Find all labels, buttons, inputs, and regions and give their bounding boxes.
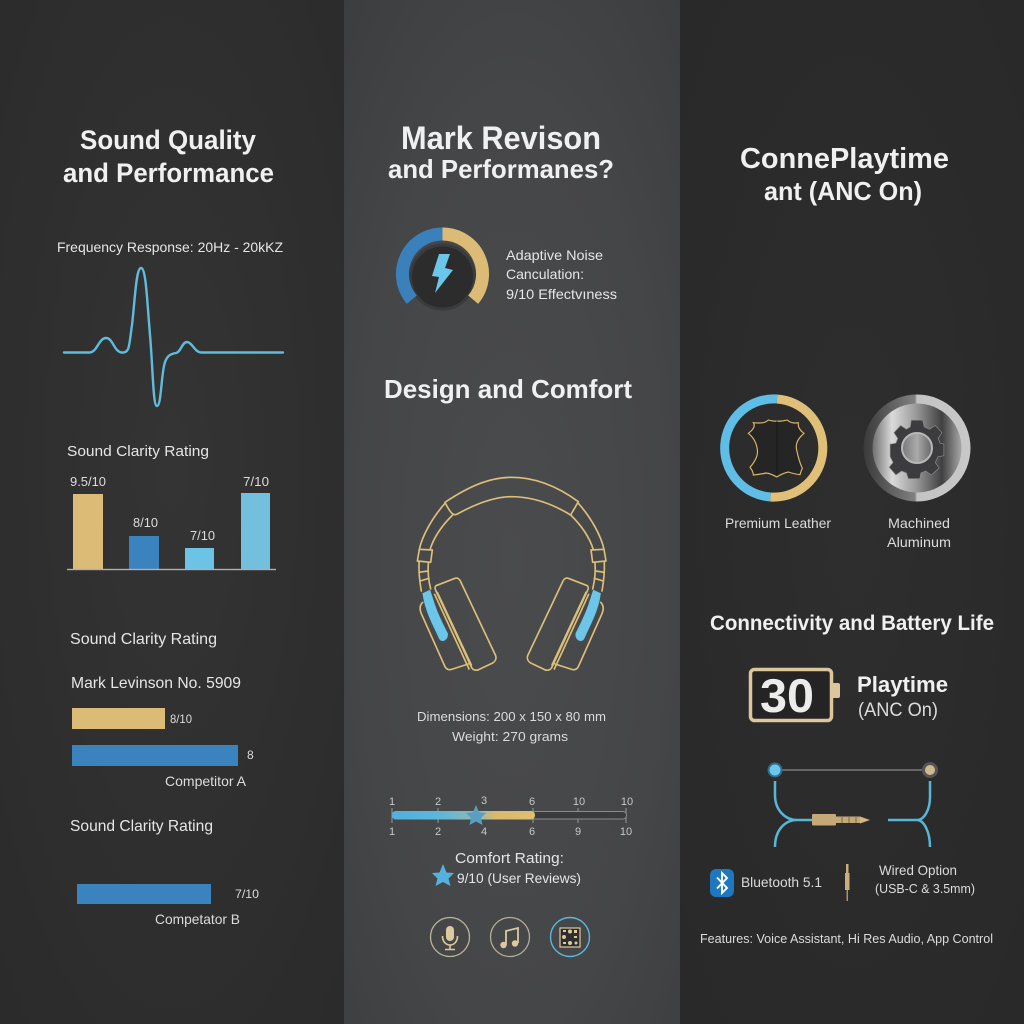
panel: materials and connectivity xyxy=(680,0,1024,1024)
text: comfort rating: 9/10 (User Reviews) xyxy=(457,870,581,886)
icon: microphone xyxy=(430,918,470,956)
frequency response label: Frequency Response: 20Hz - 20kKZ xyxy=(57,239,283,255)
text: comfort rating xyxy=(432,850,581,886)
text: dimensions and weight: Weight: 270 grams xyxy=(452,729,569,744)
icon: bluetooth xyxy=(710,869,734,897)
chart: frequency response wave xyxy=(64,268,283,406)
label: premium leather: Premium Leather xyxy=(725,515,831,531)
chart: comfort rating slider: 10 xyxy=(620,826,632,838)
chart: comfort rating slider: 3 xyxy=(481,795,487,807)
heading: sound quality and performance: Sound Quality xyxy=(80,125,256,155)
heading: sound quality and performance: and Performance xyxy=(63,158,274,188)
chart: sound clarity bars: 7/10 xyxy=(190,528,215,543)
chart: comfort rating slider: 6 xyxy=(529,826,535,838)
chart: competitor comparison A: Sound Clarity Rating xyxy=(70,631,217,648)
icon: battery 30 hours xyxy=(750,669,840,722)
chart: comfort rating slider: 10 xyxy=(573,796,585,808)
text: wired option xyxy=(875,862,975,896)
chart: competitor comparison A: Competitor A xyxy=(165,773,247,789)
text: adaptive noise cancellation xyxy=(506,247,617,302)
chart: competitor comparison B: 7/10 xyxy=(235,887,259,901)
chart: competitor comparison A: 8/10 xyxy=(170,712,192,726)
icon: vertical jack xyxy=(845,864,850,901)
icon: app control xyxy=(550,918,590,956)
label: bluetooth: Bluetooth 5.1 xyxy=(741,874,822,890)
heading: conneplaytime: ConnePlaytime xyxy=(740,143,949,175)
chart: comfort rating slider: 10 xyxy=(621,796,633,808)
text: wired option: (USB-C & 3.5mm) xyxy=(875,882,975,896)
heading: sound quality and performance xyxy=(63,125,274,188)
icon: slider star xyxy=(466,805,486,825)
chart: comfort rating slider: 2 xyxy=(435,826,441,838)
heading: conneplaytime: ant (ANC On) xyxy=(764,176,922,206)
icon: music note xyxy=(490,918,530,956)
chart: competitor comparison A xyxy=(70,631,254,789)
panel: sound quality xyxy=(0,0,344,1024)
chart: comfort rating slider: 4 xyxy=(481,826,487,838)
icon: audio jack xyxy=(812,814,870,826)
icon: lightning bolt xyxy=(432,254,453,293)
chart: competitor comparison A: 8 xyxy=(247,748,254,762)
chart: comfort rating slider: 1 xyxy=(389,826,395,838)
chart: sound clarity bars: 7/10 xyxy=(243,474,269,489)
text: comfort rating: Comfort Rating: xyxy=(455,850,564,867)
chart: sound clarity bars: 9.5/10 xyxy=(70,474,106,489)
chart: competitor comparison B: Sound Clarity Rating xyxy=(70,818,213,835)
text: playtime anc on xyxy=(857,672,948,721)
text: adaptive noise cancellation: Adaptive Noise xyxy=(506,247,603,263)
chart: comfort rating slider: 2 xyxy=(435,796,441,808)
chart: sound clarity bars xyxy=(67,443,276,570)
heading: mark revison: Mark Revison xyxy=(401,120,601,156)
icon: machined aluminum xyxy=(864,394,970,502)
gauge: noise cancellation xyxy=(402,234,483,309)
chart: comfort rating slider: 1 xyxy=(389,796,395,808)
gear hub xyxy=(902,433,932,463)
text: playtime anc on: Playtime xyxy=(857,672,948,697)
icon: battery 30 hours: 30 xyxy=(760,669,814,722)
chart: competitor comparison B: Competator B xyxy=(155,911,240,927)
text: playtime anc on: (ANC On) xyxy=(858,700,938,721)
icon: headphones xyxy=(417,477,606,670)
text: adaptive noise cancellation: 9/10 Effectvıness xyxy=(506,286,617,302)
chart: sound clarity bars: Sound Clarity Rating xyxy=(67,443,209,460)
heading: mark revison xyxy=(388,120,614,184)
label: machined aluminum: Machined xyxy=(888,515,950,531)
heading: connectivity and battery life: Connectivity and Battery Life xyxy=(710,612,994,635)
text: wired option: Wired Option xyxy=(879,862,957,878)
label: machined aluminum: Aluminum xyxy=(887,534,951,550)
heading: design and comfort: Design and Comfort xyxy=(384,374,632,404)
label: machined aluminum xyxy=(887,515,951,550)
chart: competitor comparison A: Mark Levinson No. 5909 xyxy=(71,675,241,692)
chart: comfort rating slider xyxy=(389,795,633,838)
chart: comfort rating slider: 9 xyxy=(575,826,581,838)
heading: mark revison: and Performanes? xyxy=(388,154,614,184)
text: features: Features: Voice Assistant, Hi Res Audio, App Control xyxy=(700,931,993,946)
chart: sound clarity bars: 8/10 xyxy=(133,515,158,530)
chart: competitor comparison B xyxy=(70,818,259,927)
text: adaptive noise cancellation: Canculation: xyxy=(506,266,584,282)
text: dimensions and weight: Dimensions: 200 x 150 x 80 mm xyxy=(417,709,606,724)
diagram: cable connection xyxy=(768,764,936,847)
chart: comfort rating slider: 6 xyxy=(529,796,535,808)
heading: conneplaytime xyxy=(740,143,949,206)
panel: noise cancelling and design xyxy=(344,0,680,1024)
icon: premium leather xyxy=(725,399,823,497)
icon: gear xyxy=(889,420,944,479)
text: dimensions and weight xyxy=(417,709,606,744)
